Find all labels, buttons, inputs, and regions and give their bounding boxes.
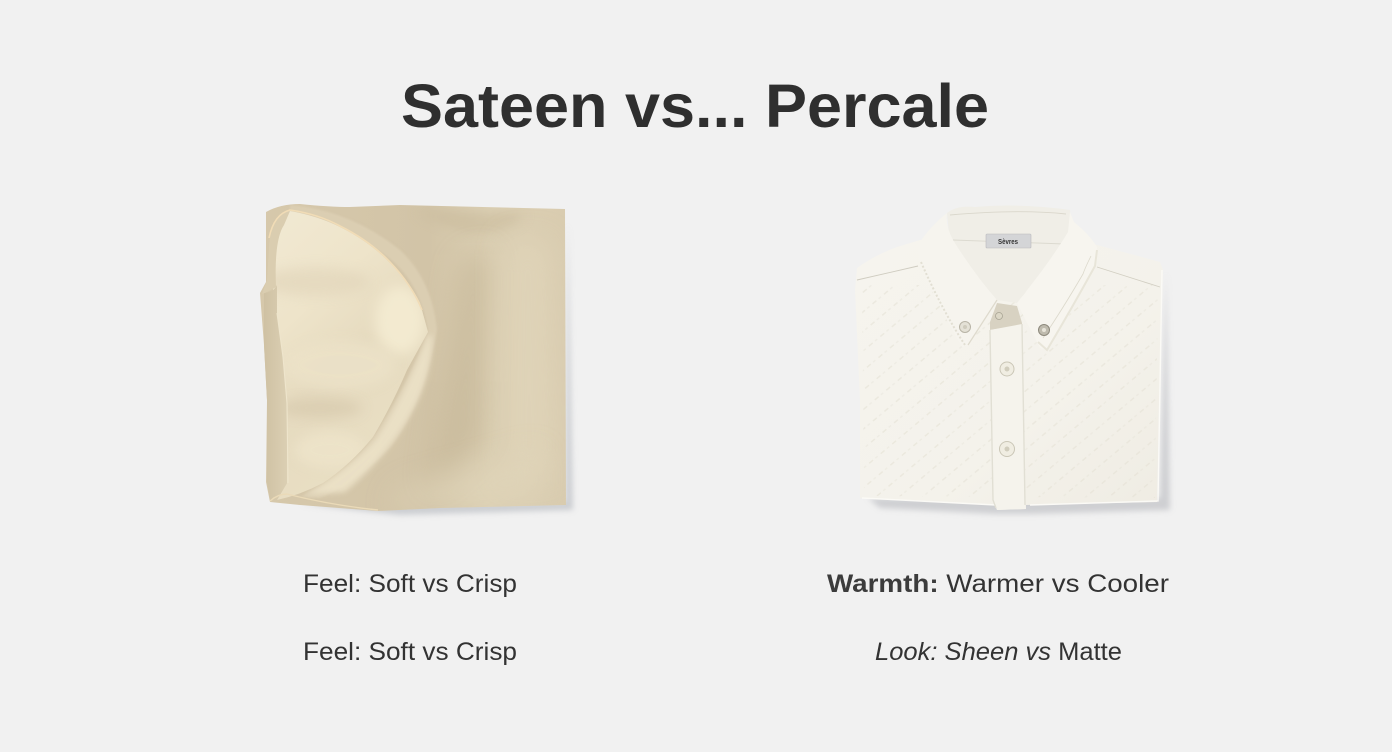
sateen body xyxy=(260,204,566,511)
neck label: Sèvres xyxy=(998,237,1018,246)
infographic canvas xyxy=(260,82,1172,665)
illustration: folded percale shirt xyxy=(855,206,1170,514)
side and hem edges xyxy=(862,270,1162,505)
collar inner back xyxy=(947,206,1072,303)
title: Sateen vs... Percale xyxy=(401,72,989,140)
rolled fold band xyxy=(292,208,436,341)
sateen sheen and folds xyxy=(292,208,516,498)
caption: look: Look: Sheen vs Matte xyxy=(875,638,1122,666)
fabric shadow xyxy=(300,222,573,515)
caption: feel, left: Feel: Soft vs Crisp xyxy=(303,570,517,598)
inner shading xyxy=(274,270,424,418)
shirt body xyxy=(855,240,1163,510)
placket xyxy=(990,324,1026,510)
shirt shadow xyxy=(868,272,1170,514)
fabric texture xyxy=(862,285,1158,498)
caption: warmth: Warmth: Warmer vs Cooler xyxy=(827,570,1169,598)
placket buttons xyxy=(1000,362,1014,456)
collar left leaf xyxy=(917,213,997,347)
caption: feel, repeated: Feel: Soft vs Crisp xyxy=(303,638,517,666)
neck label xyxy=(986,234,1031,248)
collar right leaf xyxy=(1017,212,1097,350)
inner opening xyxy=(270,211,428,500)
neck gap xyxy=(990,303,1022,330)
left hem xyxy=(264,285,287,500)
illustration: folded sateen fabric xyxy=(260,204,573,515)
piping edge xyxy=(269,210,422,310)
collar buttons xyxy=(960,312,1050,336)
shoulder seams xyxy=(857,266,918,280)
